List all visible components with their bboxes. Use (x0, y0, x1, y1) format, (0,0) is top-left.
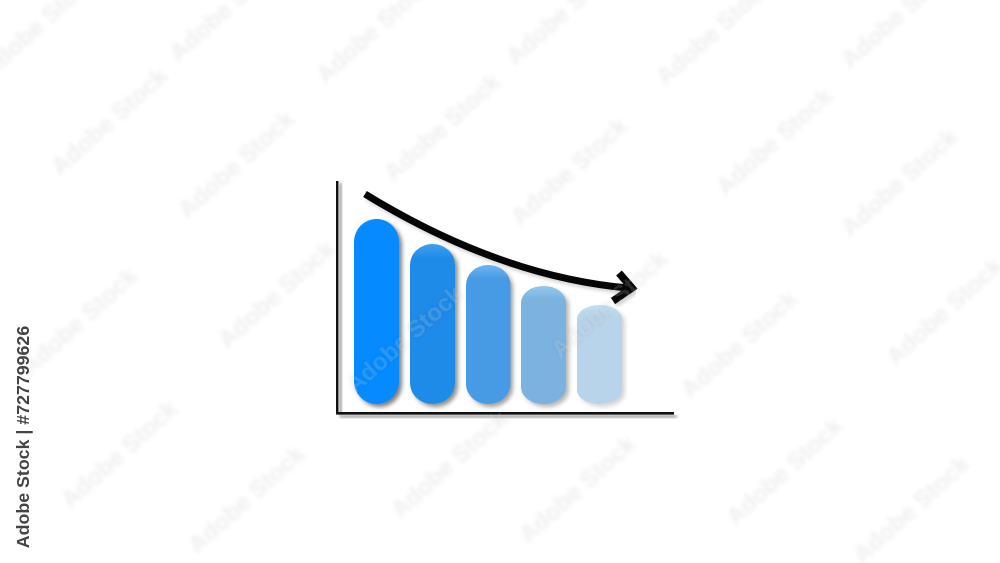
watermark pattern: Adobe Stock (506, 113, 633, 231)
bar 4 (521, 286, 569, 407)
bar 3 (466, 265, 513, 407)
watermark pattern: Adobe Stock (16, 263, 143, 381)
watermark pattern: Adobe Stock (676, 286, 803, 404)
watermark pattern: Adobe Stock (46, 63, 173, 181)
bar 1 (354, 219, 402, 407)
bar 2 (410, 244, 458, 407)
watermark pattern: Adobe Stock (213, 236, 340, 354)
watermark pattern: Adobe Stock (836, 124, 963, 242)
watermark pattern: Adobe Stock (56, 396, 183, 514)
stock credit text: Adobe Stock | #727799626 (13, 326, 33, 548)
watermark pattern: Adobe Stock (341, 281, 468, 399)
watermark pattern: Adobe Stock (183, 441, 310, 559)
watermark pattern: Adobe Stock (386, 406, 513, 524)
watermark pattern: Adobe Stock (721, 413, 848, 531)
watermark pattern: Adobe Stock (546, 246, 673, 364)
watermark pattern: Adobe Stock (711, 83, 838, 201)
watermark pattern: Adobe Stock (173, 106, 300, 224)
watermark pattern: Adobe Stock (379, 69, 506, 187)
y axis (336, 181, 342, 415)
x axis (336, 412, 677, 418)
bar 5 (577, 305, 625, 407)
downward trend arrow (365, 194, 634, 304)
watermark pattern: Adobe Stock (514, 431, 641, 549)
